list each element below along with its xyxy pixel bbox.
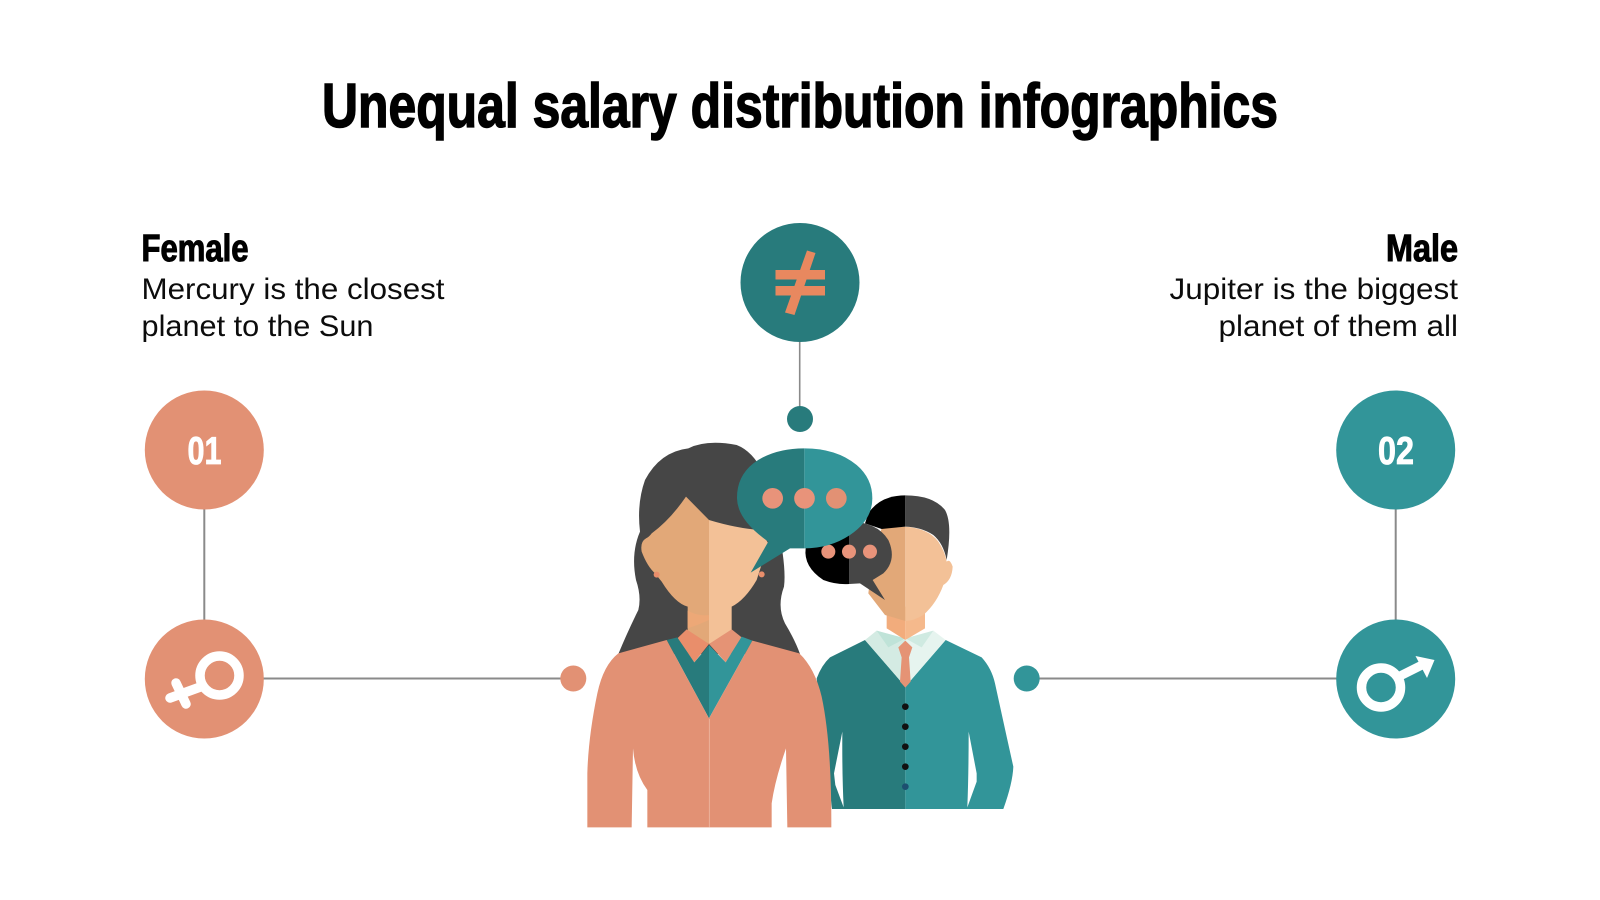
text block: female: planet to the Sun <box>142 310 374 343</box>
text block: male: Jupiter is the biggest <box>1170 273 1459 306</box>
speech bubble: small <box>805 522 892 600</box>
title: Unequal salary distribution infographics <box>322 72 1278 141</box>
illustration: people talking <box>587 443 1013 827</box>
icon: not equal symbol <box>740 223 860 342</box>
figure: man <box>817 495 1013 809</box>
connector dot: left <box>560 666 586 692</box>
badge: 01: 01 <box>188 430 222 473</box>
connector dot: top <box>787 406 813 432</box>
speech bubble: large <box>737 448 872 573</box>
badge: 02 <box>1336 390 1455 510</box>
text block: male: Male <box>1386 228 1458 270</box>
text block: male: planet of them all <box>1218 310 1458 343</box>
text block: female: Mercury is the closest <box>142 273 445 306</box>
badge: 02: 02 <box>1378 430 1414 473</box>
badge: 01 <box>145 390 264 510</box>
connector dot: right <box>1014 666 1040 692</box>
text block: male <box>1170 228 1459 343</box>
text block: female: Female <box>142 228 248 270</box>
icon: female symbol <box>145 620 264 738</box>
text block: female <box>142 228 445 343</box>
figure: woman <box>587 443 831 827</box>
icon: male symbol <box>1336 620 1455 738</box>
